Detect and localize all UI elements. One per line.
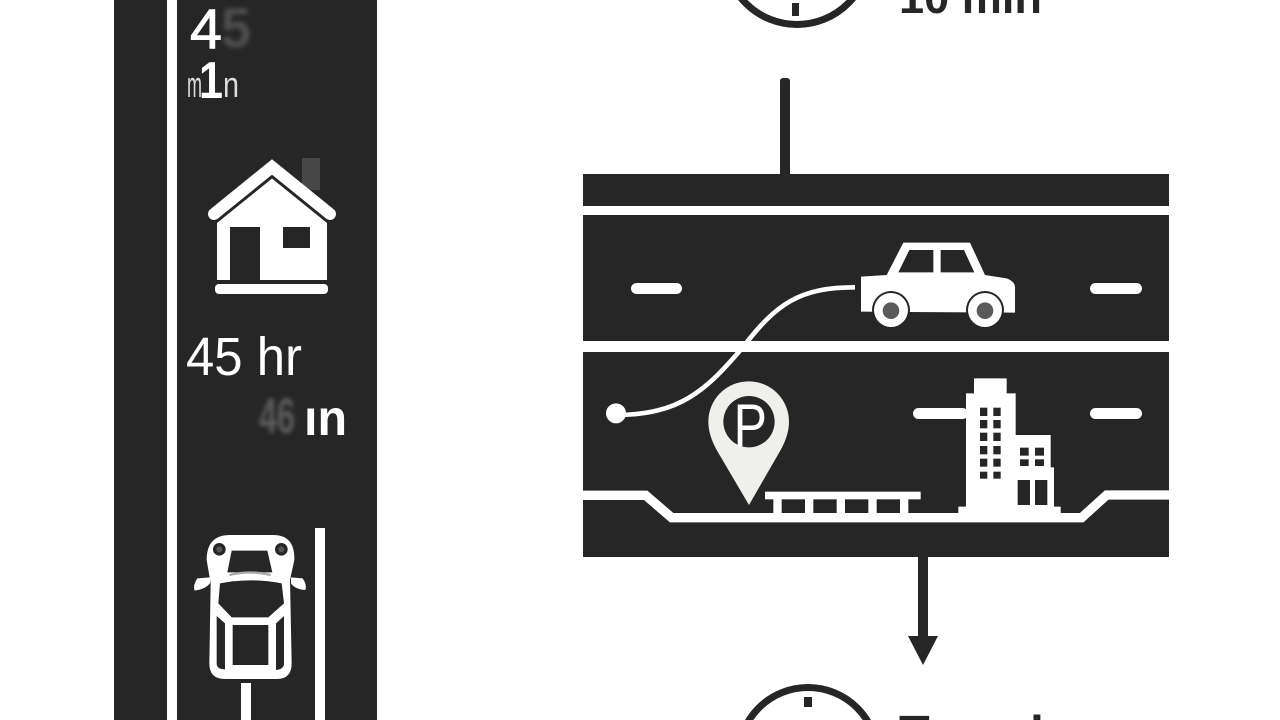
time label: top 45 min: n [223, 64, 239, 105]
icon: side view car [861, 243, 1015, 329]
icon: parking pin: P [734, 392, 767, 459]
clock: bottom [745, 684, 871, 720]
time label: 45 hr: 45 hr [186, 327, 302, 387]
time label: blurred min fragment: ın [304, 390, 347, 446]
icon: house [214, 158, 330, 294]
time label: blurred min fragment: 46 [259, 388, 295, 444]
road edge line [583, 495, 1169, 518]
panel: vertical road strip [114, 0, 377, 720]
time label: top 45 min: 1 [199, 52, 223, 110]
arrow: down to next step [908, 555, 938, 665]
road lane line [315, 528, 325, 720]
time label: top 45 min: m [187, 64, 202, 105]
time label: blurred min fragment [259, 388, 347, 446]
route line with start dot [606, 287, 855, 423]
clock: top [738, 0, 856, 28]
icon: platform bench [765, 492, 921, 515]
icon: parking pin [708, 381, 789, 505]
road dashes [631, 283, 1142, 419]
panel: road map [583, 174, 1169, 557]
icon: city buildings [958, 378, 1061, 515]
icon: car from above [194, 535, 306, 679]
connector line [780, 78, 790, 178]
road centre dash [241, 683, 251, 720]
time label: top 45 min [187, 0, 251, 110]
